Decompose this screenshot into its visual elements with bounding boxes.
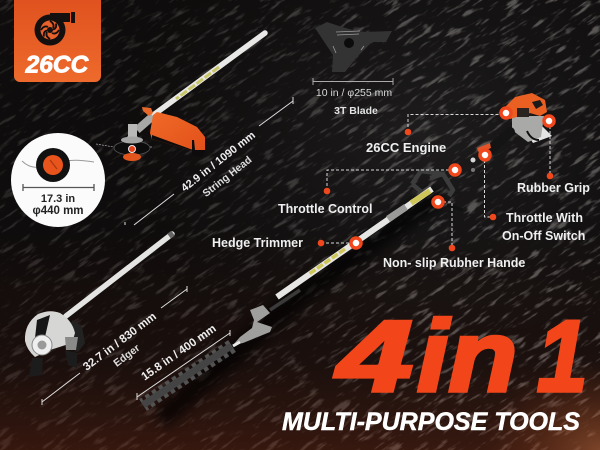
icon: trimmer spool (22, 148, 94, 182)
callout labels: 26CC Engine (366, 140, 446, 155)
dimension: string head: String Head (200, 154, 254, 200)
tool: hedge trimmer blade (143, 346, 232, 405)
callout labels: Non- slip Rubher Hande (383, 256, 525, 270)
inset: cutting swath circle: φ440 mm (32, 205, 84, 217)
inset: cutting swath circle (11, 133, 105, 227)
callout labels: Throttle With (506, 211, 583, 225)
badge: 26CC engine (14, 0, 101, 82)
headline: 4 in 1: 1 (537, 301, 588, 413)
gearbox (233, 305, 272, 345)
dimension: hedge trimmer (137, 323, 230, 400)
dimension: edger (42, 286, 187, 405)
tool: 3T blade: 10 in / φ255 mm (316, 87, 392, 99)
callout labels: Throttle Control (278, 202, 372, 216)
badge label: 26CC (25, 52, 89, 78)
tool: edger (25, 233, 173, 377)
headline: 4 in 1: in (417, 300, 518, 413)
callout labels: On-Off Switch (502, 229, 585, 243)
shaft (277, 189, 432, 297)
tool: 3T blade (313, 22, 393, 117)
callout labels: Rubber Grip (517, 181, 590, 195)
blade dimension (313, 78, 393, 85)
callout labels (212, 140, 590, 270)
dimension: hedge trimmer: 15.8 in / 400 mm (139, 323, 219, 383)
headline: 4 in 1 (335, 300, 588, 413)
dimension: string head: 42.9 in / 1090 mm (179, 129, 258, 195)
headline: 4 in 1: 4 (335, 300, 413, 413)
callout markers (318, 108, 554, 251)
tool: string head (96, 33, 265, 161)
engine (502, 93, 562, 143)
callout labels: Hedge Trimmer (212, 236, 303, 250)
icon: turbine (34, 12, 75, 46)
dimension: edger: 32.7 in / 830 mm (81, 311, 159, 373)
tool: 3T blade: 3T Blade (334, 105, 378, 117)
subheading: multi-purpose tools: MULTI-PURPOSE TOOLS (282, 408, 580, 436)
loop handle (412, 171, 453, 196)
swath label: 17.3 in (41, 193, 75, 205)
tool: main pole with engine (233, 93, 562, 346)
shadow under main pole (160, 195, 440, 420)
dimension: string head (125, 97, 293, 225)
dimension: edger: Edger (111, 342, 142, 370)
callout lines (321, 114, 550, 248)
